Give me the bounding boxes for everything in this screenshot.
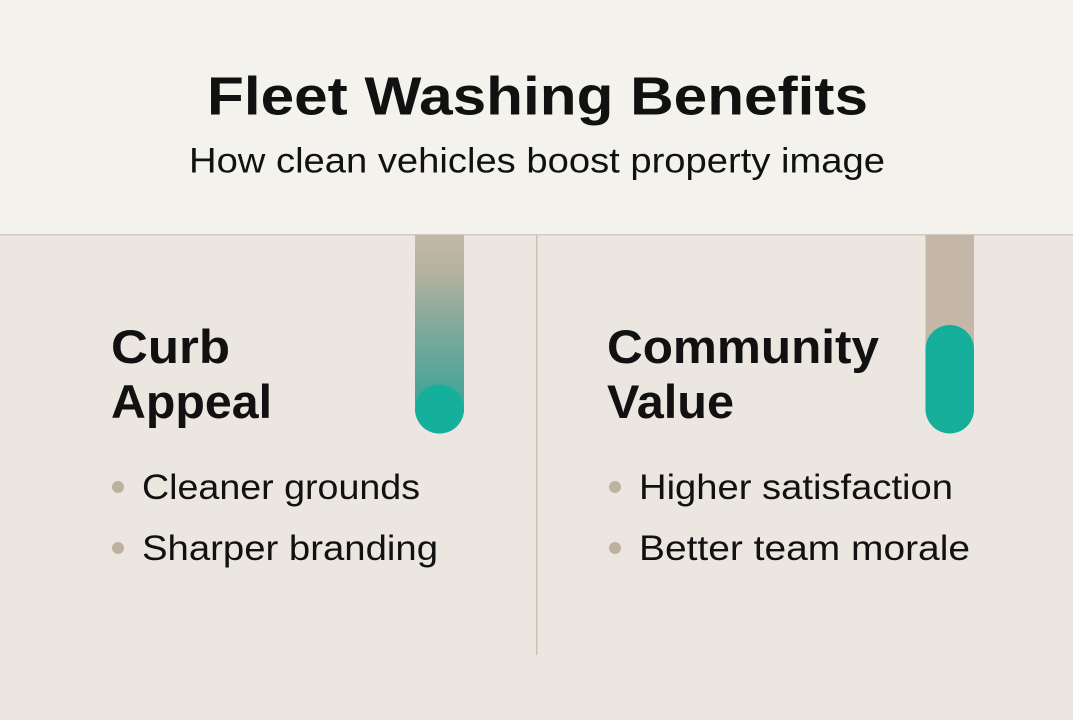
bullet list: curb appeal: [112, 468, 438, 568]
heading: community value: Value: [607, 375, 734, 428]
gauge: community value: [926, 235, 974, 434]
heading: community value: Community: [607, 320, 879, 373]
subtitle: How clean vehicles boost property image: [189, 142, 885, 180]
heading: community value: [607, 320, 879, 428]
gauge: curb appeal: [415, 235, 464, 434]
panel: community value: [607, 235, 974, 568]
bullet: cleaner grounds: Cleaner grounds: [142, 468, 420, 507]
bullet: sharper branding: Sharper branding: [142, 529, 438, 568]
heading: curb appeal: Appeal: [111, 375, 272, 428]
heading: curb appeal: Curb: [111, 320, 230, 373]
column divider: [536, 235, 538, 655]
heading: curb appeal: [111, 320, 272, 428]
panel: curb appeal: [111, 235, 464, 568]
bullet list: community value: [609, 468, 970, 568]
bullet: higher satisfaction: Higher satisfaction: [639, 468, 953, 507]
title: Fleet Washing Benefits: [207, 66, 868, 126]
bullet: better team morale: Better team morale: [639, 529, 970, 568]
